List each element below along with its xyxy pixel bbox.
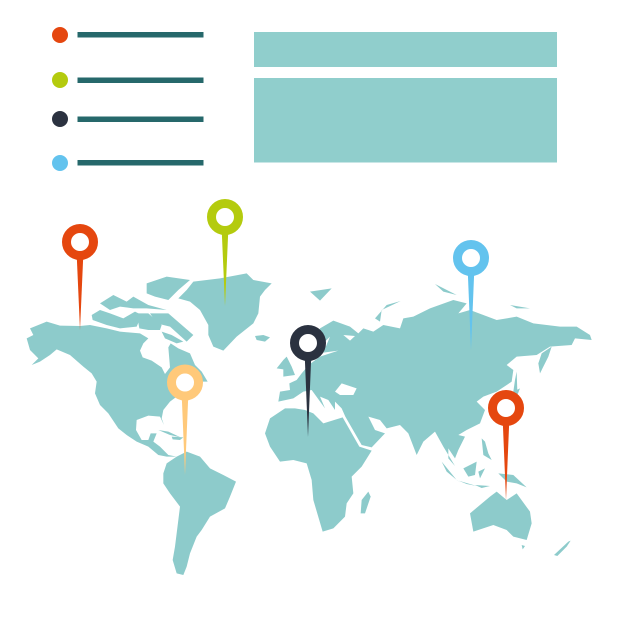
map: Americas	[27, 273, 295, 575]
legend	[52, 27, 204, 171]
pin: green, Greenland	[212, 204, 238, 306]
pin: navy, Europe	[294, 330, 322, 437]
pin: blue, Russia	[458, 244, 484, 350]
pin: red, North America	[66, 228, 94, 330]
legend item: navy	[52, 111, 204, 127]
legend item: blue	[52, 155, 204, 171]
legend item: green	[52, 72, 204, 88]
header panel	[254, 32, 557, 67]
map: Eurasia, Africa, Oceania	[265, 284, 592, 556]
body panel	[254, 78, 557, 162]
pin: red, Australia	[492, 394, 520, 500]
pin: yellow, Americas	[172, 369, 198, 475]
world map	[27, 273, 592, 575]
legend item: red	[52, 27, 204, 43]
map: inland seas	[310, 335, 357, 395]
